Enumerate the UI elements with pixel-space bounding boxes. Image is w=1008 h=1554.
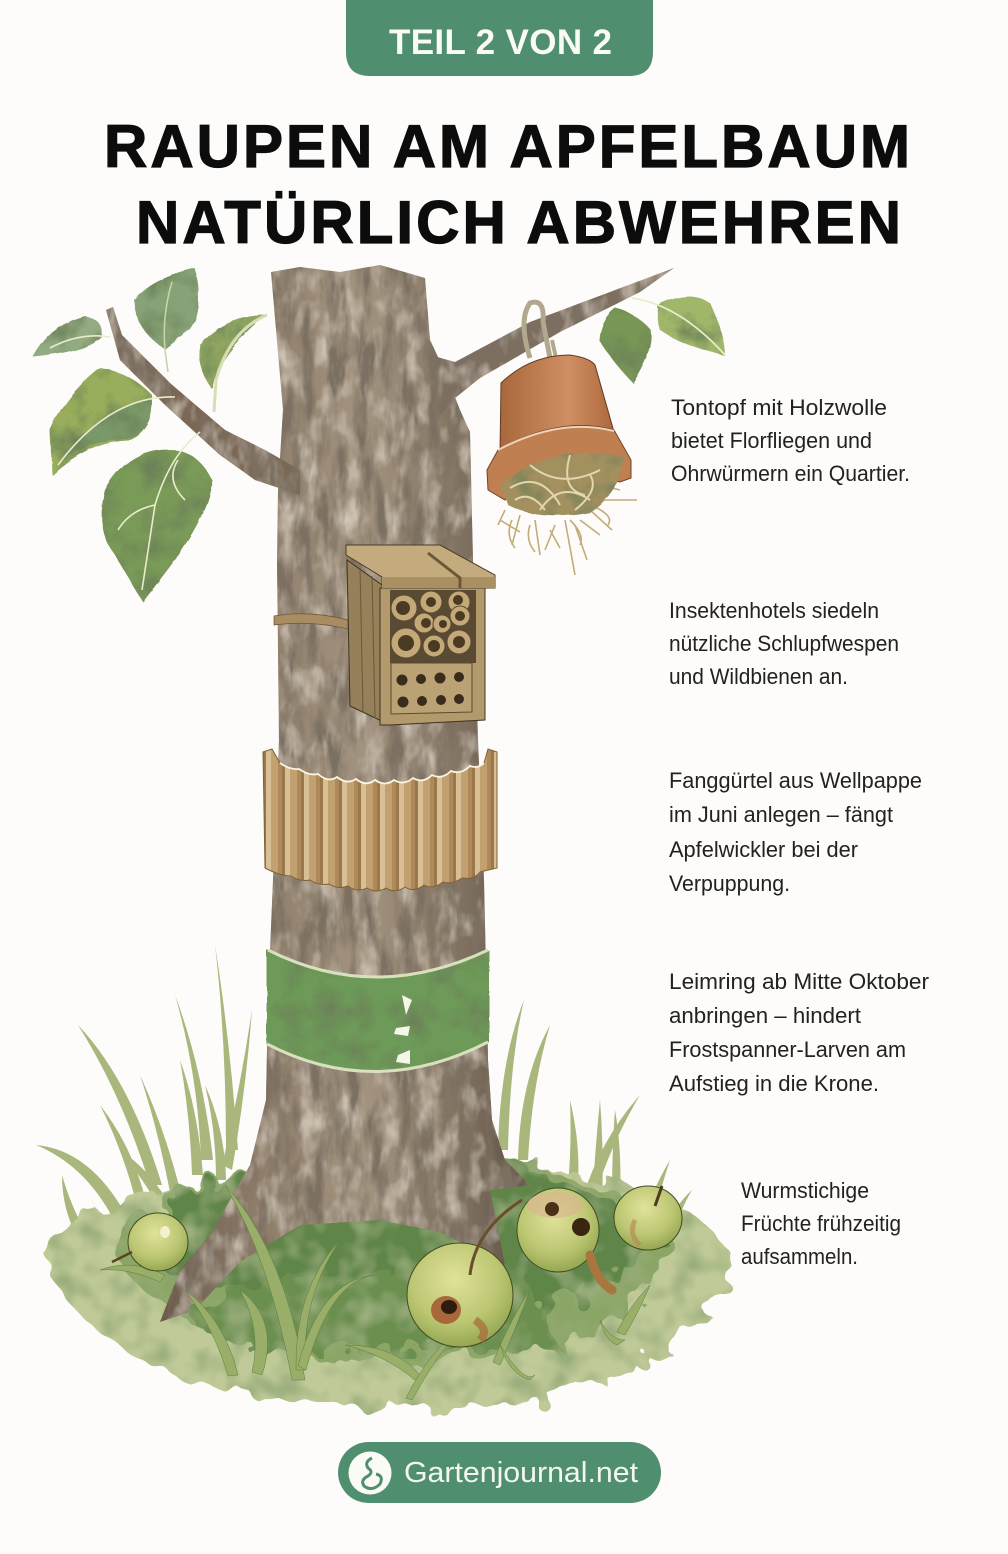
rope around trunk [274,614,348,629]
leaf: hanging [599,308,652,383]
text: glue ring: anbringen – hindert [669,1003,861,1028]
leaf: lower [102,432,212,602]
pot body [500,355,614,455]
front [380,588,485,725]
tubes [391,591,471,658]
text: fallen fruit: aufsammeln. [741,1244,858,1269]
drilled block [391,663,472,714]
footer brand pill: Gartenjournal.net [404,1457,638,1489]
apple: large front [407,1200,522,1347]
caterpillar [590,1255,612,1290]
banner: part indicator: TEIL 2 VON 2 [389,23,612,62]
text: clay pot: bietet Florfliegen und [671,428,872,453]
text: glue ring: Frostspanner-Larven am [669,1037,906,1062]
leaf: upper right [199,315,267,412]
left branch [106,307,300,495]
grass tufts behind trunk [36,945,692,1238]
roof [346,545,495,588]
text: insect hotel: nützliche Schlupfwespen [669,631,899,656]
wood wool strands [498,485,637,575]
grass overlay at trunk base [190,1262,560,1350]
text: glue ring: Leimring ab Mitte Oktober [669,969,929,994]
apple: right [614,1186,682,1250]
text: clay pot: Tontopf mit Holzwolle [671,395,887,420]
hanging loop [524,302,550,358]
title [104,113,910,256]
text: fallen fruit: Wurmstichige [741,1178,869,1203]
text: fallen fruit: Früchte frühzeitig [741,1211,901,1236]
text: glue ring: Aufstieg in die Krone. [669,1071,879,1096]
leaf: top [134,268,199,372]
leaf: middle [50,368,175,475]
text: trap band [669,768,922,896]
text: trap band: Apfelwickler bei der [669,837,858,862]
text: insect hotel: Insektenhotels siedeln [669,598,879,623]
text: trap band: Verpuppung. [669,871,790,896]
right branch [430,268,674,415]
text: clay pot: Ohrwürmern ein Quartier. [671,461,910,486]
mid wash [110,1170,675,1359]
dark wash [135,1165,660,1315]
apple: wormy middle [517,1188,599,1272]
text: insect hotel [669,598,899,689]
side wall [347,560,390,725]
tree trunk [160,265,530,1322]
title: RAUPEN AM APFELBAUM [104,113,910,180]
flower pot with wood wool [487,302,637,575]
text: trap band: Fanggürtel aus Wellpappe [669,768,922,793]
text: insect hotel: und Wildbienen an. [669,664,848,689]
left leaves [33,268,267,602]
grass blades in front [100,1185,650,1400]
text: trap band: im Juni anlegen – fängt [669,802,893,827]
text: fallen fruit [741,1178,901,1269]
banner: part indicator [346,0,653,76]
wool ball [500,453,625,516]
meadow: ground with grass [36,945,728,1408]
insect hotel [346,545,495,725]
pale wash [40,1170,728,1408]
title: NATÜRLICH ABWEHREN [136,189,901,256]
corrugated trap band [263,749,497,891]
leaf: upper left small [33,316,110,357]
icon: logo [348,1452,392,1494]
right leaves [599,296,725,383]
text: glue ring [669,969,929,1096]
footer brand pill [338,1442,661,1503]
apple: left [112,1213,188,1271]
leaf: right [657,296,725,356]
text: clay pot [671,395,910,486]
pot rim [487,426,631,500]
glue ring [267,950,489,1072]
wool highlights [510,455,600,510]
